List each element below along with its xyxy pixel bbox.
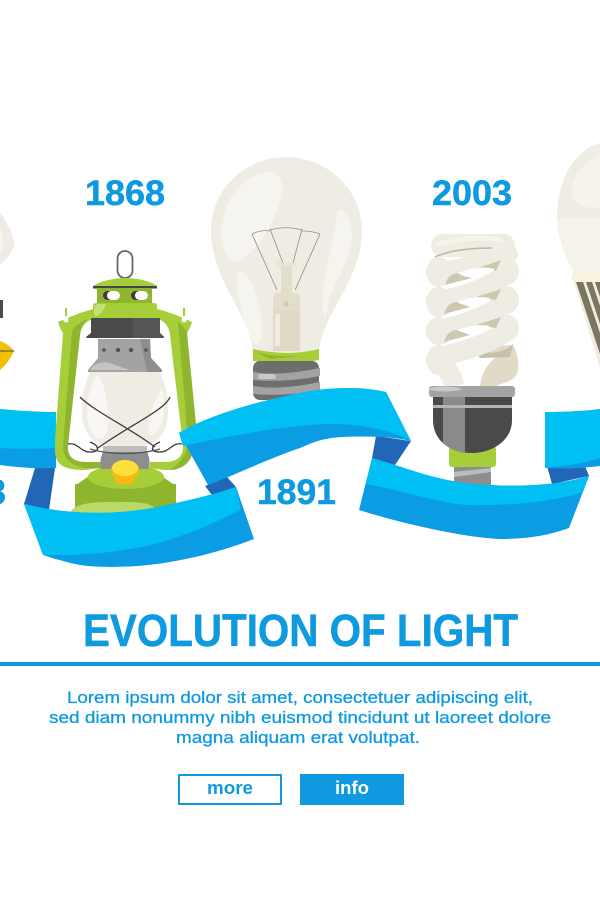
filament and stem xyxy=(252,228,320,351)
button: info: info xyxy=(335,778,369,798)
screw xyxy=(454,467,491,485)
grey rim xyxy=(429,386,515,397)
LED heat sink xyxy=(574,282,600,368)
description text: magna aliquam erat volutpat. xyxy=(176,728,420,747)
LED collar xyxy=(571,272,600,282)
description text: sed diam nonummy nibh euismod tincidunt ut laoreet dolore xyxy=(49,708,551,727)
title: EVOLUTION OF LIGHT xyxy=(83,605,518,656)
button: more xyxy=(179,775,281,804)
spiral tube xyxy=(426,234,519,375)
lantern base xyxy=(70,465,176,520)
icon: compact fluorescent spiral bulb xyxy=(426,234,519,485)
LED globe xyxy=(557,143,600,272)
spiral shadows xyxy=(444,260,501,342)
spiral gaps xyxy=(457,268,495,333)
ribbon: third section xyxy=(359,458,589,539)
description text: Lorem ipsum dolor sit amet, consectetuer adipiscing elit, xyxy=(67,688,533,707)
green collar xyxy=(253,349,319,363)
button: more: more xyxy=(207,778,253,798)
divider rule xyxy=(0,662,600,666)
right leg of tube xyxy=(473,345,518,386)
ribbon: right section xyxy=(545,409,600,468)
lantern dark ring xyxy=(86,318,164,338)
glass globe xyxy=(211,157,362,352)
lantern lid xyxy=(93,278,157,286)
year label: 1891: 1891 xyxy=(257,473,336,512)
description text xyxy=(49,688,551,747)
green collar xyxy=(449,446,496,467)
lantern glass xyxy=(82,372,168,446)
lantern grey burner top xyxy=(88,339,162,372)
ribbon: second section xyxy=(179,388,411,485)
lantern collar xyxy=(93,303,157,318)
dark socket xyxy=(433,397,512,453)
lantern vent housing xyxy=(97,288,152,305)
year label: 1868: 1868 xyxy=(85,174,165,213)
lantern yellow knob xyxy=(111,460,139,484)
globe highlights xyxy=(222,172,352,345)
button: info xyxy=(300,774,404,805)
year label: 2003: 2003 xyxy=(432,174,512,213)
screw base xyxy=(253,361,320,400)
lantern frame xyxy=(55,308,196,470)
ribbon: left strip xyxy=(0,409,56,468)
ribbon: back folds xyxy=(24,436,589,510)
lantern handle xyxy=(118,251,132,278)
ribbon: main left section xyxy=(24,487,254,567)
lower base xyxy=(429,386,515,485)
icon: LED bulb at right edge xyxy=(557,143,600,368)
icon: partial bulb at left edge xyxy=(0,212,14,370)
icon: oil lantern xyxy=(55,251,196,520)
lantern burner xyxy=(100,446,150,469)
icon: incandescent bulb xyxy=(211,157,362,400)
lantern wire guard xyxy=(68,397,182,454)
